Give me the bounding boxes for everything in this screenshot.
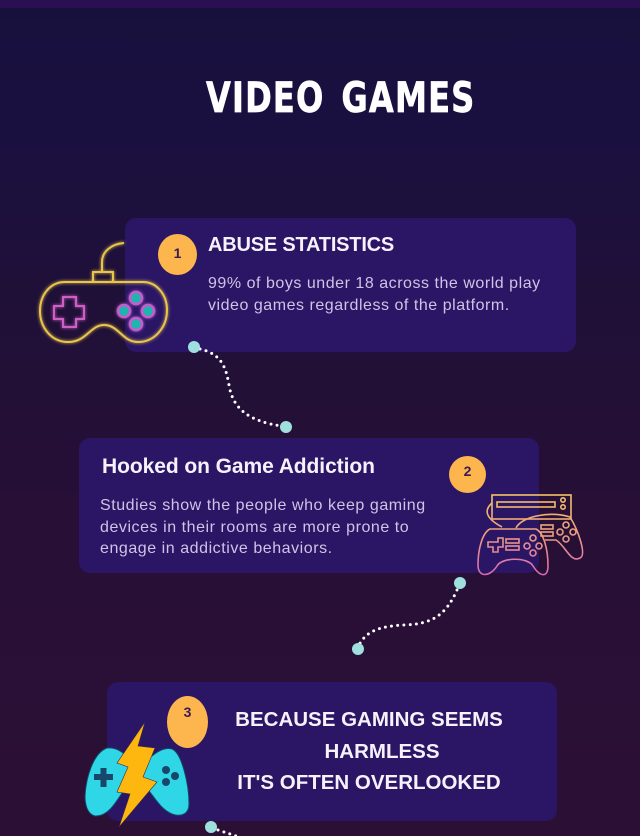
heading 3: IT'S OFTEN OVERLOOKED (237, 771, 501, 794)
icon: console and gamepads (478, 495, 583, 575)
icon: neon gamepad (40, 243, 167, 342)
connector 1 (188, 341, 292, 433)
connector 2 (352, 577, 466, 655)
badge 2: 2 (464, 463, 471, 479)
heading 1: ABUSE STATISTICS (208, 234, 394, 256)
badge 1: 1 (174, 245, 181, 261)
badge 3: 3 (184, 704, 191, 720)
badge 1 (158, 234, 197, 275)
text block 2: Studies show the people who keep gaming (100, 497, 426, 514)
title: VIDEO GAMES (206, 73, 475, 122)
text block 1: video games regardless of the platform. (208, 297, 510, 314)
heading 2: Hooked on Game Addiction (102, 455, 375, 478)
heading 3: BECAUSE GAMING SEEMS (235, 708, 503, 731)
panel: card 2 (79, 438, 539, 573)
heading 3 (235, 708, 503, 794)
panel: card 1 (125, 218, 576, 352)
badge 3 (167, 696, 208, 748)
text block 2 (100, 497, 426, 557)
text block 2: engage in addictive behaviors. (100, 540, 333, 557)
text block 1: 99% of boys under 18 across the world play (208, 275, 541, 292)
text block 2: devices in their rooms are more prone to (100, 518, 409, 536)
icon: lightning gamepad (85, 722, 189, 827)
heading 3: HARMLESS (324, 740, 440, 762)
text block 1 (208, 275, 541, 314)
top edge strip (0, 0, 640, 8)
badge 2 (449, 456, 486, 493)
connector 3 (205, 821, 236, 836)
panel: card 3 (107, 682, 557, 821)
